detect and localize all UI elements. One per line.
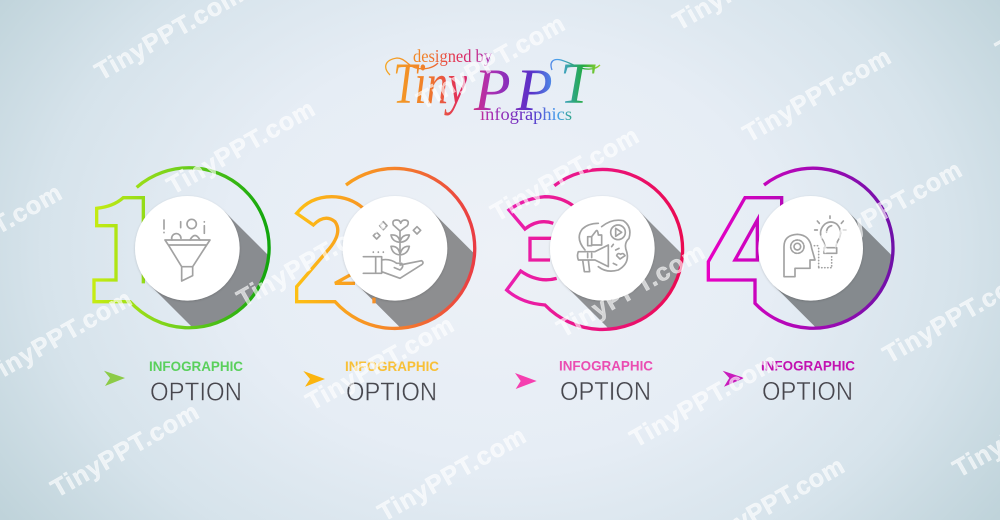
watermarks: TinyPPT.com [809,156,967,261]
option 4: INFOGRAPHIC [761,358,855,374]
watermarks: TinyPPT.com [412,10,570,115]
step 3 badge [504,168,684,332]
option 1: OPTION [150,376,242,406]
icon: head with gear and bulb [784,216,846,277]
option 2: OPTION [346,376,437,406]
arrow 2 [303,371,325,387]
logo: designed by [413,46,492,66]
ring and numeral 2 [297,168,475,328]
ring and numeral 1 [94,168,269,328]
long shadow 3 [566,212,681,328]
arrow 4 [723,371,744,387]
icon: funnel [164,219,210,281]
logo: infographics [480,104,572,124]
step 4 badge [706,166,895,330]
option 2 [303,358,439,406]
long shadow 2 [358,212,473,327]
ring and numeral 4 [708,168,893,328]
option 3 [515,358,653,406]
watermarks: TinyPPT.com [46,398,204,503]
arrow 3 [515,373,537,389]
option 2: INFOGRAPHIC [345,358,439,374]
watermarks: TinyPPT.com [552,238,710,343]
step 1 badge [92,166,271,330]
logo: Tiny [393,51,467,116]
option 3: OPTION [560,376,651,406]
watermarks: TinyPPT.com [625,348,783,453]
icon: social megaphone [577,220,630,272]
watermarks: TinyPPT.com [162,95,320,200]
option 1 [104,358,243,406]
logo: P [473,57,511,123]
icon: hand with plant [363,220,423,278]
arrow 1 [104,371,125,386]
logo: P [515,57,553,123]
white disc 3 [550,196,655,301]
white disc 4 [758,196,863,301]
watermarks: TinyPPT.com [232,208,390,313]
step 2 badge [294,166,476,330]
long shadow 1 [150,212,268,326]
option 3: INFOGRAPHIC [559,358,653,374]
white disc 1 [135,196,240,301]
option 1: INFOGRAPHIC [149,358,243,374]
watermarks: TinyPPT.com [301,311,459,416]
ring and numeral 3 [507,169,683,329]
logo: T [560,51,596,116]
watermarks: TinyPPT.com [486,122,644,227]
option 4: OPTION [762,376,853,406]
long shadow 4 [774,212,891,326]
white disc 2 [343,196,447,301]
logo [386,46,600,124]
option 4 [723,358,855,406]
watermarks: TinyPPT.com [738,43,896,148]
